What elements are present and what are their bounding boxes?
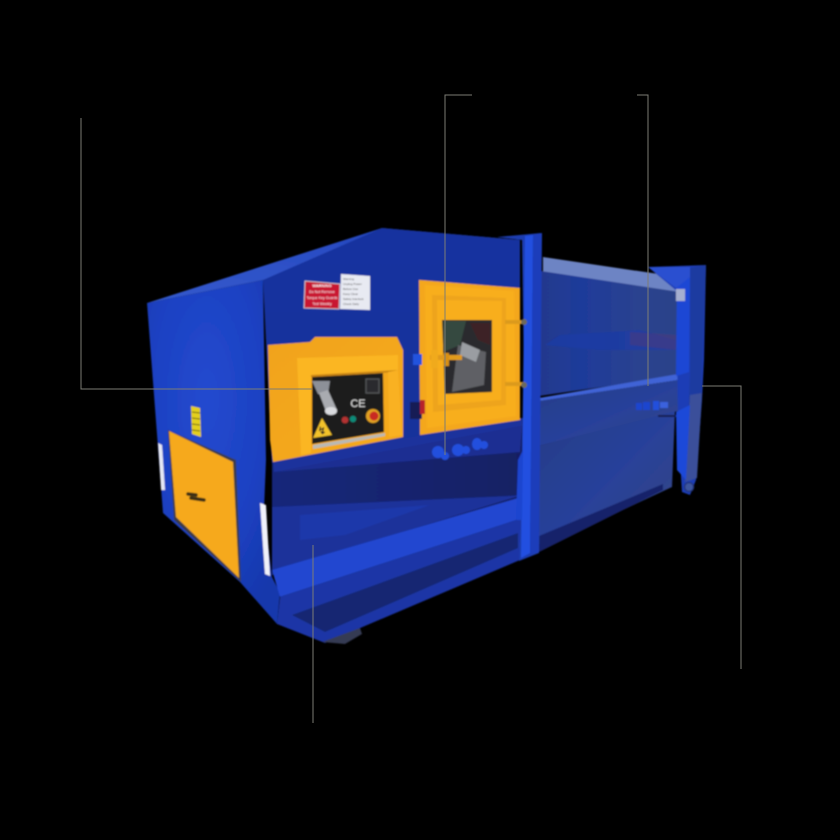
rear container body [539, 257, 692, 552]
control panel housing [268, 337, 403, 462]
inspection door [410, 280, 527, 435]
rear door frame [648, 265, 706, 495]
compactor machine photo [147, 228, 706, 644]
door hinges [505, 319, 527, 388]
callout line: lower body [312, 545, 314, 723]
door handle [430, 350, 462, 368]
hatch handle [188, 494, 204, 500]
indicator buttons [342, 409, 380, 423]
CE mark: CE [350, 398, 366, 410]
rear locking bolts [636, 401, 676, 417]
warning sticker: red: WARNING [312, 283, 332, 288]
warning sticker: red: Torque Key Guards [307, 296, 338, 300]
front post [497, 233, 542, 561]
power socket [312, 381, 337, 415]
callout line: rear door [702, 386, 741, 669]
yellow warning label [191, 406, 201, 437]
instruction sticker: white: Keep Clear [343, 292, 358, 296]
instruction sticker: white: Warning [343, 277, 354, 281]
white side reflector strips [158, 443, 270, 576]
callout line: control panel [81, 118, 312, 389]
door hinge [684, 482, 694, 492]
hazard triangle: ↯ [318, 426, 326, 437]
instruction sticker: white: Check Daily [343, 302, 360, 306]
interlock switch [410, 400, 425, 419]
instruction sticker: white [340, 274, 370, 310]
blue latch [413, 354, 422, 365]
instruction sticker: white: Safety Interlock [343, 297, 364, 301]
callout line: rear body [637, 95, 648, 386]
isolator switch [366, 379, 379, 393]
inspection window [442, 320, 492, 394]
callout line: inspection door [445, 95, 472, 455]
warning sticker: red: Test Weekly [312, 302, 332, 306]
warning sticker: red: Do Not Remove [309, 290, 335, 294]
warning sticker: red [304, 281, 340, 309]
side access hatch [168, 430, 241, 582]
instruction sticker: white: Before Use [343, 287, 358, 291]
main body: roof [147, 228, 520, 303]
instruction sticker: white: Unplug Power [343, 282, 362, 286]
control panel fascia [312, 373, 384, 444]
locking bolts [432, 438, 488, 460]
main body: lower section [272, 418, 523, 575]
main body: side face [147, 280, 280, 624]
